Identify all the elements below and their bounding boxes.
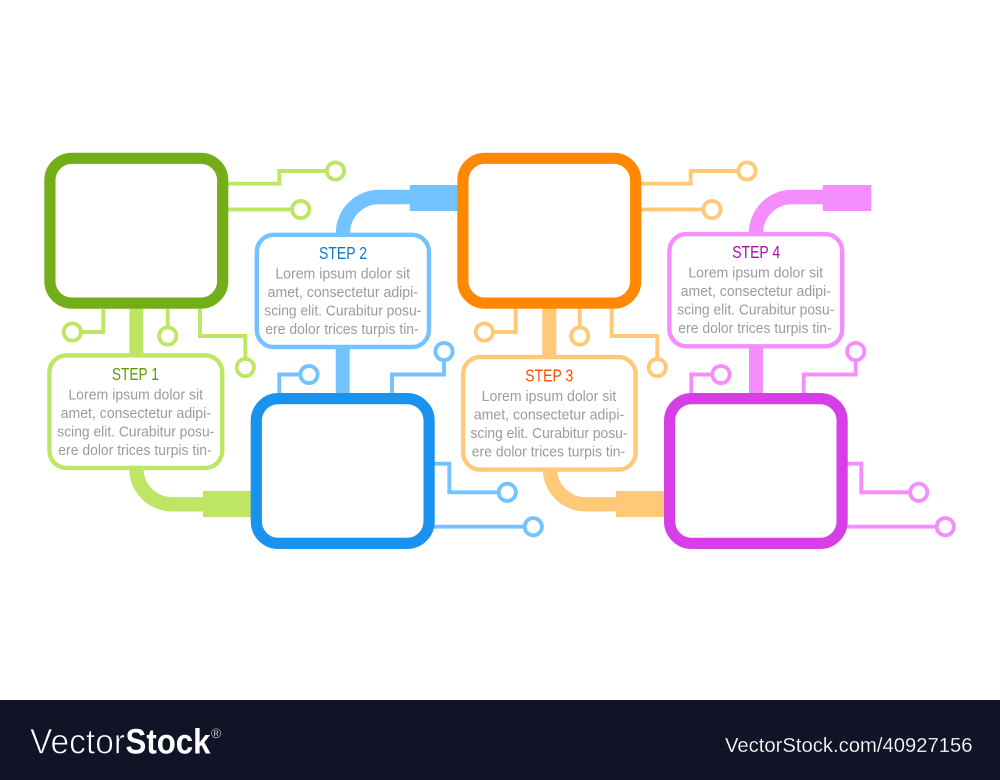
- body text: step 2: scing elit. Curabitur posu-: [264, 302, 421, 319]
- body text: step 3: Lorem ipsum dolor sit: [482, 388, 617, 405]
- connector stem: step 3: [542, 308, 556, 358]
- text card: step 2: [257, 235, 429, 347]
- circuit lines: step 4: [691, 343, 954, 535]
- body text: step 2: [264, 265, 421, 338]
- image frame: step 3: [463, 158, 636, 303]
- logo: VectorStock: [30, 722, 222, 761]
- image frame: step 1: [50, 158, 223, 303]
- body text: step 2: Lorem ipsum dolor sit: [275, 265, 411, 282]
- body text: step 1: amet, consectetur adipi-: [61, 405, 211, 422]
- connector pipe: step 3 to step 4: [550, 469, 665, 517]
- body text: step 2: ere dolor trices turpis tin-: [265, 321, 419, 338]
- circuit lines: step 3: [476, 162, 756, 376]
- heading: step 4: STEP 4: [732, 242, 780, 262]
- step 4: purple: [669, 185, 954, 543]
- logo: VectorStock: ®: [211, 725, 222, 741]
- body text: step 4: ere dolor trices turpis tin-: [678, 320, 832, 337]
- body text: step 3: [470, 388, 628, 461]
- logo: VectorStock: Vector: [30, 722, 125, 761]
- body text: step 4: Lorem ipsum dolor sit: [688, 264, 824, 282]
- body text: step 4: amet, consectetur adipi-: [681, 283, 831, 300]
- body text: step 3: scing elit. Curabitur posu-: [470, 425, 628, 442]
- heading: step 3: STEP 3: [525, 366, 573, 386]
- connector stem: step 2: [336, 347, 350, 395]
- image frame: step 2: [256, 399, 429, 543]
- body text: step 4: scing elit. Curabitur posu-: [677, 302, 834, 318]
- text card: step 4: [669, 234, 842, 346]
- step 3: orange: [463, 158, 756, 517]
- connector stem: step 1: [129, 308, 143, 356]
- body text: step 3: ere dolor trices turpis tin-: [472, 444, 625, 461]
- text card: step 3: [463, 357, 636, 470]
- connector pipe: step 2 to step 3: [343, 185, 458, 236]
- heading: step 1: STEP 1: [112, 364, 159, 384]
- step 2: blue: [256, 185, 542, 543]
- body text: step 1: [57, 386, 214, 459]
- logo: VectorStock: Stock: [126, 722, 211, 761]
- circuit lines: step 1: [64, 162, 344, 376]
- body text: step 2: amet, consectetur adipi-: [268, 284, 418, 301]
- connector pipe: step 4 end: [756, 185, 871, 235]
- connector pipe: step 1 to step 2: [136, 468, 251, 517]
- step 1: green: [49, 158, 344, 517]
- body text: step 1: ere dolor trices turpis tin-: [58, 442, 212, 459]
- text card: step 1: [49, 355, 222, 468]
- footer bar: [0, 700, 1000, 780]
- heading: step 2: STEP 2: [319, 243, 367, 263]
- image frame: step 4: [670, 399, 842, 543]
- body text: step 1: Lorem ipsum dolor sit: [68, 386, 204, 403]
- circuit lines: step 2: [279, 343, 542, 535]
- connector stem: step 4: [749, 346, 763, 395]
- body text: step 1: scing elit. Curabitur posu-: [57, 424, 214, 440]
- footer url: VectorStock.com/40927156: [725, 735, 972, 757]
- body text: step 4: [677, 264, 834, 337]
- body text: step 3: amet, consectetur adipi-: [474, 407, 624, 424]
